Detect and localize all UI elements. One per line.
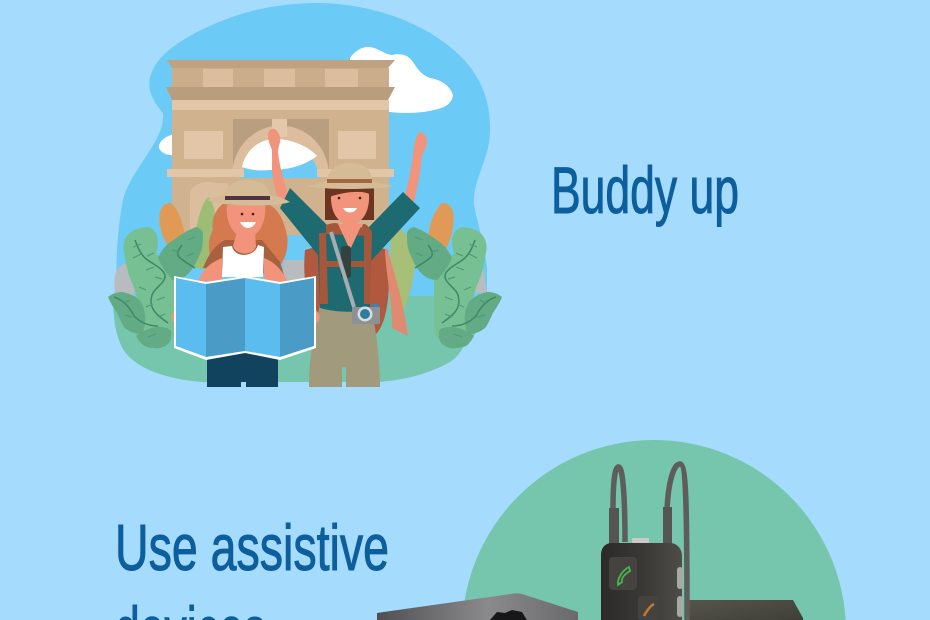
receiver body [601,543,682,620]
arch monument [166,60,395,235]
folded map [174,276,316,360]
cloud: right [350,47,453,113]
rocks [114,260,487,295]
camera strap [331,232,354,307]
woman face [227,205,265,238]
man hat [307,163,393,189]
man shirt [280,188,420,312]
man cape and backpack [304,245,389,340]
woman backpack [203,240,284,275]
neck loop wire [613,464,687,620]
man trousers [309,306,380,387]
heading: Buddy up: Buddy up [551,153,739,227]
woman top [222,245,264,277]
woman [198,180,290,387]
woman hair [209,203,288,272]
box device: right [688,600,803,620]
neck loop sleeves [609,507,672,544]
woman arms [198,258,288,282]
ground [113,296,468,382]
man head and hair [325,188,374,220]
woman trousers [207,352,278,387]
circle behind devices [462,440,846,620]
man [268,129,427,387]
plant: left [108,227,203,348]
woman neck [233,232,256,254]
sky blob [116,3,490,300]
illustration: two tourists at the Arc de Triomphe [108,3,502,387]
man sunglasses [341,246,351,278]
call button [609,557,637,590]
heading: Use assistive devices [115,511,389,620]
hands holding the map [172,310,320,324]
side buttons [677,567,683,617]
woman hat [207,180,290,206]
box device: left [377,593,578,620]
assistive listening devices [377,464,803,620]
second button [638,596,659,620]
camera [352,304,380,324]
man arm right [403,132,427,205]
cloud: left [159,134,175,155]
receiver top button [632,538,649,543]
man arm left [268,129,290,205]
man backpack straps [319,233,372,304]
background leaves [159,197,454,320]
plant: right [407,227,502,348]
first line: Use assistive [115,511,389,584]
